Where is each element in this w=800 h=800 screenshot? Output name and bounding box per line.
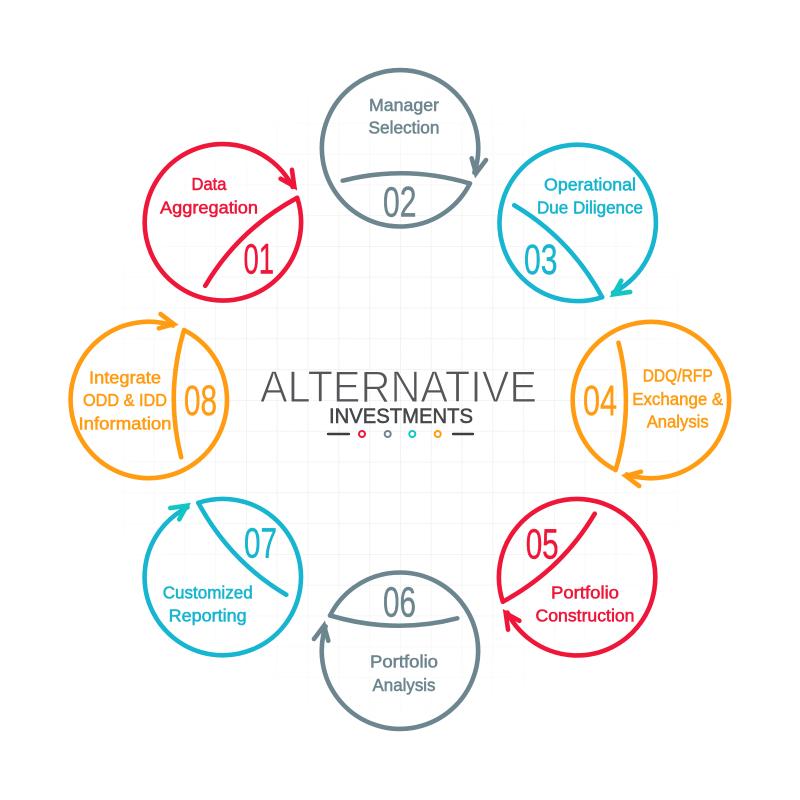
ring with arrow 08 — [71, 314, 227, 478]
label: Manager Selection — [368, 95, 440, 137]
label: Portfolio Analysis: Portfolio — [370, 652, 438, 672]
label: Manager Selection: Manager — [369, 95, 439, 115]
step 05: Portfolio Construction — [461, 467, 688, 693]
title: ALTERNATIVE: ALTERNATIVE — [260, 363, 537, 412]
number 02: 02 — [383, 179, 416, 227]
ring with arrow 01 — [112, 106, 339, 333]
step 02: Manager Selection — [322, 70, 486, 227]
number 06: 06 — [383, 579, 416, 627]
subtitle: INVESTMENTS: INVESTMENTS — [329, 405, 473, 428]
ring with arrow 04 — [573, 322, 729, 486]
label: Integrate ODD & IDD Information: Information — [78, 413, 172, 433]
label: DDQ/RFP Exchange & Analysis: Analysis — [647, 412, 709, 432]
label: Operational Due Diligence — [537, 175, 643, 217]
label: Integrate ODD & IDD Information — [78, 367, 172, 433]
label: Data Aggregation — [160, 174, 258, 217]
step 03: Operational Due Diligence — [467, 112, 694, 339]
label: Portfolio Analysis — [370, 652, 438, 695]
label: Portfolio Analysis: Analysis — [372, 675, 436, 695]
label: Customized Reporting: Reporting — [169, 606, 247, 626]
step 07: Customized Reporting — [107, 461, 333, 688]
ring with arrow 07 — [107, 461, 333, 688]
label: Data Aggregation: Aggregation — [160, 197, 258, 217]
step 08: Integrate ODD & IDD Information — [71, 314, 227, 478]
ring with arrow 05 — [461, 467, 688, 693]
label: DDQ/RFP Exchange & Analysis: DDQ/RFP — [643, 366, 713, 386]
label: Manager Selection: Selection — [368, 117, 440, 137]
number 04: 04 — [583, 377, 617, 425]
label: Portfolio Construction — [536, 582, 634, 626]
label: Integrate ODD & IDD Information: Integrate — [89, 367, 161, 387]
label: Customized Reporting: Customized — [163, 582, 253, 602]
number 01: 01 — [244, 235, 274, 283]
label: DDQ/RFP Exchange & Analysis: Exchange & — [632, 389, 724, 409]
number 05: 05 — [526, 520, 559, 568]
label: Integrate ODD & IDD Information: ODD & IDD — [83, 390, 167, 410]
step 01: Data Aggregation — [112, 106, 339, 333]
ring with arrow 03 — [467, 112, 694, 339]
number 03: 03 — [524, 236, 558, 284]
step 04: DDQ/RFP Exchange & Analysis — [573, 322, 729, 486]
label: Portfolio Construction: Portfolio — [551, 582, 619, 602]
center title block — [260, 363, 537, 437]
ring with arrow 06 — [314, 573, 478, 729]
ring with arrow 02 — [322, 70, 486, 226]
label: Operational Due Diligence: Due Diligence — [537, 197, 643, 217]
number 08: 08 — [184, 377, 217, 425]
label: Portfolio Construction: Construction — [536, 606, 634, 626]
number 07: 07 — [244, 520, 277, 568]
step 06: Portfolio Analysis — [314, 573, 478, 729]
label: Operational Due Diligence: Operational — [544, 175, 636, 195]
decorative rule with dots — [328, 431, 473, 437]
label: Customized Reporting — [163, 582, 253, 626]
label: Data Aggregation: Data — [192, 174, 227, 194]
label: DDQ/RFP Exchange & Analysis — [632, 366, 724, 432]
